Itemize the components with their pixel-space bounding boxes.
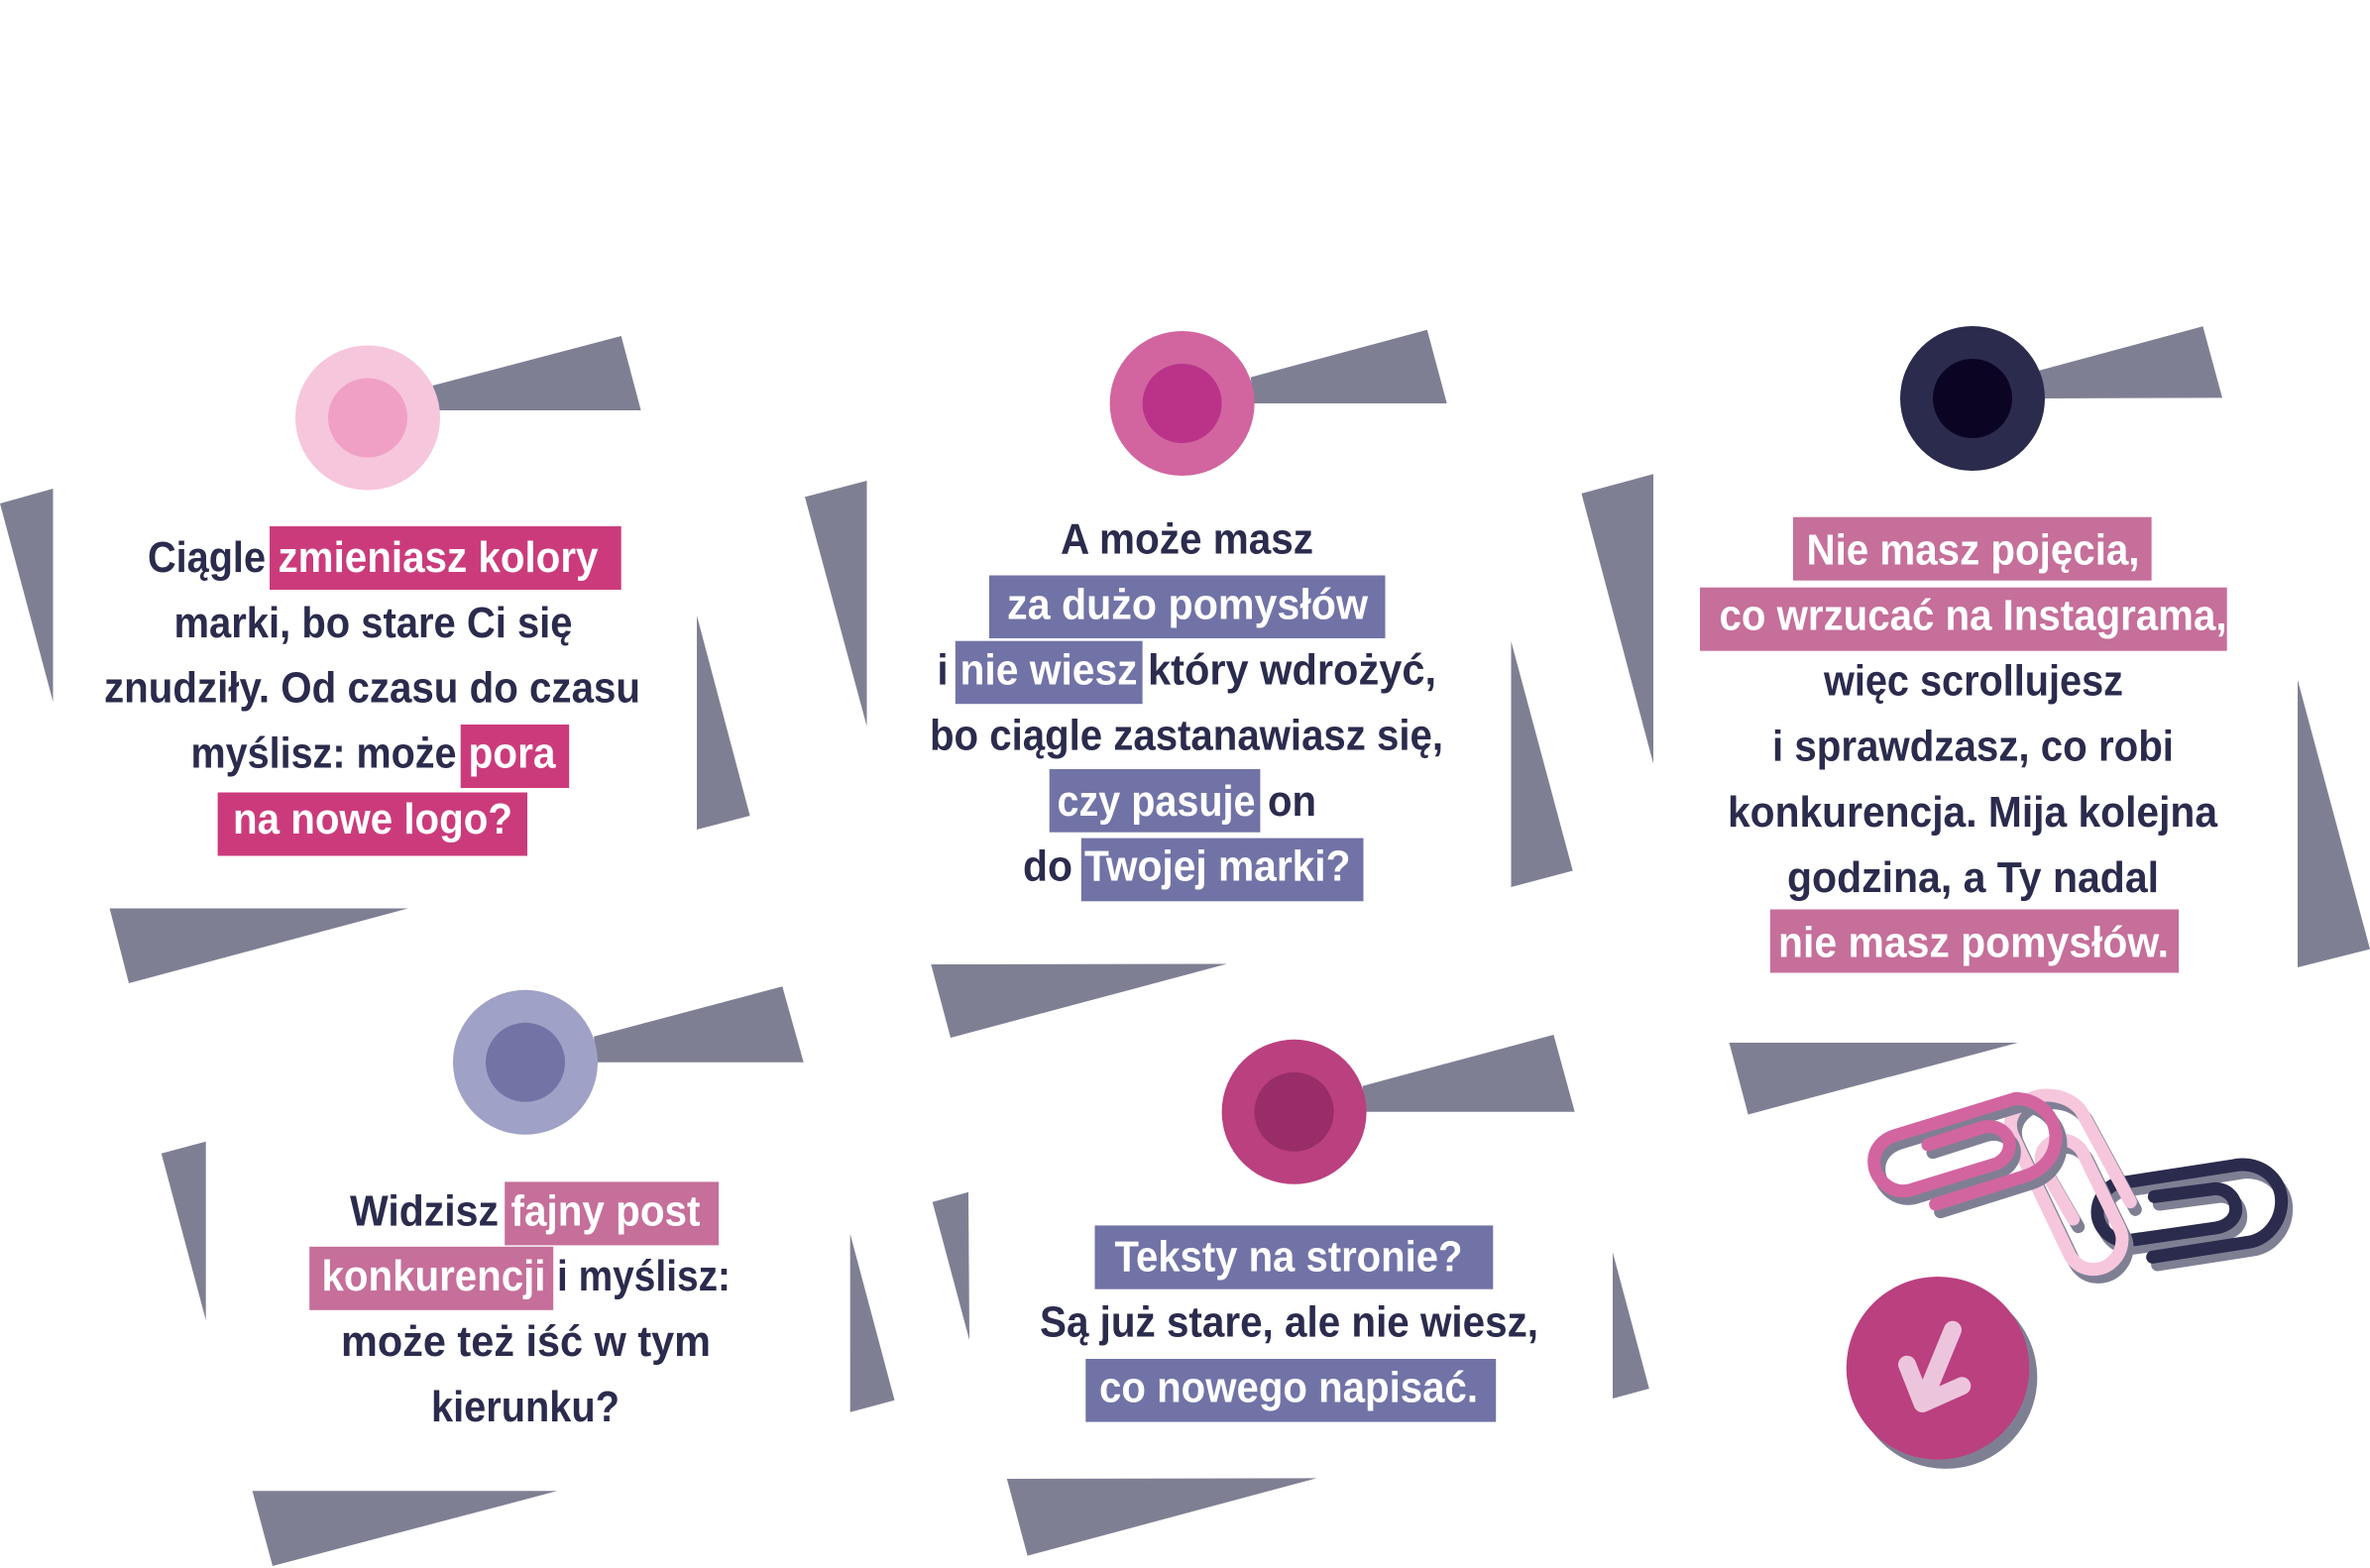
text block: card 1: Ciągle [148,533,266,582]
frame corner: left [1582,474,1653,763]
icon: pin [1110,331,1255,476]
frame corner: left [933,1192,969,1340]
text block: card 2: A może masz [1061,515,1313,564]
frame corner: right [697,616,750,830]
icon: linked paper clips [1874,1095,2287,1277]
frame corner: right [1511,641,1573,887]
frame corner: right [850,1234,894,1412]
text block: card 1: marki, bo stare Ci się [174,599,573,647]
frame corner: bottom [1729,1043,2018,1114]
icon: pin [453,990,598,1135]
text block: card 1: na nowe logo? [233,795,512,843]
text block: card 5: Teksty na stronie? [1114,1233,1463,1281]
text block: card 4: i myślisz: [557,1252,731,1300]
text block: card 2: za dużo pomysłów [1007,580,1369,628]
frame corner: right [2298,680,2370,967]
text block: card 3: konkurencja. Mija kolejna [1728,788,2217,837]
text block: card 4 [309,1181,731,1431]
text block: card 2: do [1023,841,1072,890]
text block: card 3: więc scrollujesz [1823,657,2123,706]
text block: card 3: i sprawdzasz, co robi [1772,722,2174,770]
panel: card 5, website copy [933,1035,1649,1556]
icon: pin [295,345,440,490]
frame corner: top right [433,336,641,410]
text block: card 5 [1040,1225,1538,1422]
text block: card 3: godzina, a Ty nadal [1787,853,2159,902]
frame corner: left [162,1142,206,1320]
icon: pink paper clip [1874,1098,2061,1212]
text block: card 2: i [938,646,948,694]
text block: card 2: on [1268,777,1316,826]
text block: card 2: który wdrożyć, [1148,646,1436,694]
text block: card 3 [1700,517,2227,973]
icon: dark paper clip [2097,1165,2287,1265]
text block: card 1: znudziły. Od czasu do czasu [104,664,640,712]
text block: card 2 [930,515,1443,901]
text block: card 2: Twojej marki? [1084,841,1350,890]
frame corner: top right [1362,1035,1575,1112]
text block: card 3: Nie masz pojęcia, [1806,525,2139,574]
text block: card 1: myślisz: może [190,729,456,777]
frame corner: top right [2039,326,2222,398]
text block: card 2: bo ciągle zastanawiasz się, [930,712,1443,760]
frame corner: bottom [931,963,1227,1038]
text block: card 1: pora [468,729,556,777]
frame corner: right [1613,1253,1649,1399]
frame corner: bottom [110,908,408,983]
text block: card 1: zmieniasz kolory [278,533,599,582]
panel: card 2, too many ideas [805,330,1573,1038]
icon: pin [1222,1040,1367,1184]
icon: round button with down-left arrow [1847,1277,2037,1469]
text block: card 4: Widzisz [350,1186,499,1235]
panel: card 4, competitor post [162,986,895,1566]
icon: pin [1900,326,2045,471]
text block: card 4: fajny post [511,1186,701,1235]
frame corner: bottom [253,1491,557,1566]
frame corner: left [805,481,866,727]
text block: card 5: co nowego napisać. [1099,1364,1478,1411]
text block: card 4: może też iść w tym [341,1317,711,1366]
text block: card 4: kierunku? [431,1383,620,1431]
panel: card 3, Instagram [1582,326,2370,1114]
text block: card 2: nie wiesz [959,646,1138,694]
text block: card 2: czy pasuje [1057,777,1255,826]
text block: card 4: konkurencji [321,1252,545,1300]
text block: card 3: nie masz pomysłów. [1778,919,2169,967]
frame corner: top right [1251,330,1447,403]
frame corner: left [0,489,54,702]
panel: card 1, logo and colours [0,336,750,983]
text block: card 1 [104,526,640,856]
frame corner: top right [594,986,804,1063]
icon: pale pink paper clip [2010,1095,2135,1277]
frame corner: bottom [1007,1478,1316,1556]
text block: card 5: Są już stare, ale nie wiesz, [1040,1298,1538,1346]
text block: card 3: co wrzucać na Instagrama, [1719,592,2226,640]
